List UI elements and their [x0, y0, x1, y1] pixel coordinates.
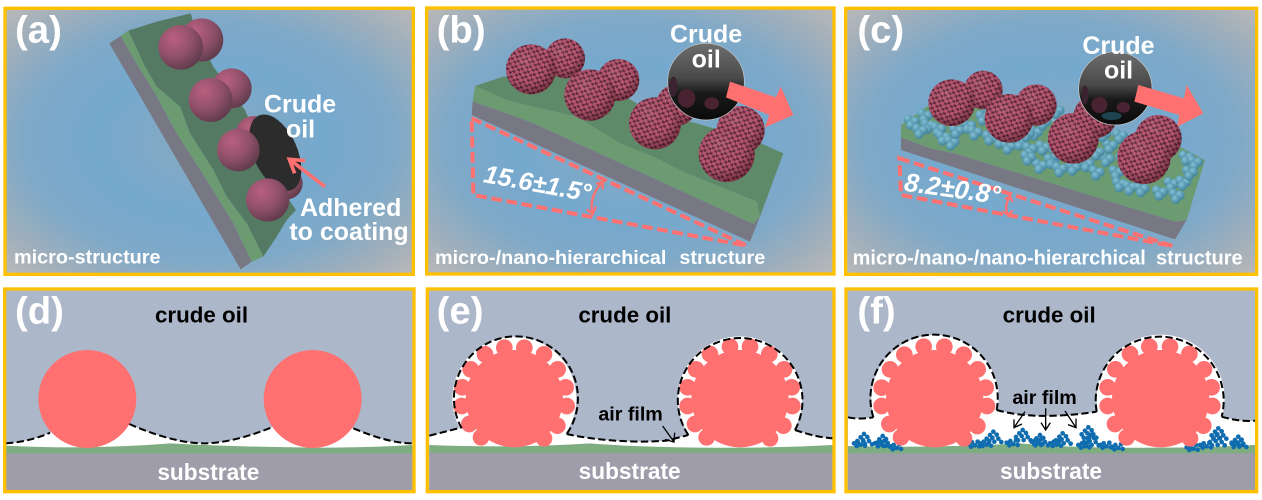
arrows: air film — [1014, 408, 1076, 430]
label: substrate: substrate — [1000, 458, 1102, 484]
label: crude oil: crude oil — [155, 303, 248, 328]
substrate side — [109, 36, 252, 269]
coating top surface — [128, 13, 296, 257]
label: crude oil: Crude — [1082, 32, 1155, 60]
coating front face — [121, 31, 263, 262]
label: crude oil: oil — [286, 115, 315, 143]
frame (a) — [5, 8, 413, 274]
nano particle clusters — [904, 99, 1203, 204]
substrate side — [472, 102, 760, 242]
label: crude oil: oil — [1104, 56, 1133, 84]
label: crude oil: Crude — [264, 91, 336, 119]
air pockets — [848, 335, 1255, 463]
label: structure name: micro-/nano-/nano-hierarchical — [853, 248, 1146, 270]
coating front face — [901, 125, 1187, 222]
panel (f): micro-/nano-/nano wetting — [846, 289, 1257, 492]
heading (f): (f) — [857, 289, 896, 332]
crude oil sphere — [668, 43, 744, 120]
dashed tilt wedge — [899, 158, 1173, 246]
label: structure name: structure — [679, 247, 765, 269]
nano-bumped sphere left — [873, 338, 995, 447]
crude oil droplet — [239, 107, 312, 199]
heading (d): (d) — [15, 289, 64, 332]
label: structure name: micro-/nano-hierarchical — [435, 247, 666, 269]
tilt angle arrow — [1003, 197, 1013, 215]
crude oil sphere — [1079, 52, 1152, 125]
nano-bumped sphere right — [1099, 338, 1221, 447]
micro spheres — [158, 18, 303, 199]
label: crude oil: crude oil — [1003, 303, 1096, 328]
label: substrate: substrate — [579, 458, 681, 484]
coating layer — [6, 443, 413, 454]
panel (d): micro-structure wetting — [5, 289, 414, 492]
front micro spheres — [217, 129, 289, 222]
substrate — [848, 453, 1255, 491]
panel (c): micro-/nano-/nano-hierarchical structure — [846, 8, 1257, 274]
nano-bumped sphere left — [453, 339, 575, 447]
panel (b): micro-/nano-hierarchical structure — [427, 8, 834, 274]
substrate — [6, 453, 413, 491]
label: crude oil: oil — [692, 45, 721, 73]
heading (a): (a) — [15, 8, 62, 51]
label: air film: air film — [598, 404, 663, 426]
substrate side — [901, 137, 1187, 239]
label: substrate: substrate — [157, 459, 259, 485]
label: air film: air film — [1012, 387, 1077, 409]
coating top surface — [475, 75, 783, 217]
tilt angle value: 8.2±0.8° — [902, 167, 1003, 210]
label: structure name: structure — [1156, 248, 1243, 270]
label: adhered to coating: to coating — [289, 218, 409, 246]
label: adhered to coating: Adhered — [300, 194, 401, 222]
tilt angle arrow — [587, 182, 603, 214]
oil interface dashed line — [6, 424, 413, 443]
frame (e) — [427, 289, 834, 492]
frame (d) — [5, 289, 414, 492]
coating top surface — [901, 100, 1205, 220]
arrow: air film — [663, 426, 675, 442]
substrate — [429, 453, 833, 491]
nano-bumped sphere right — [679, 338, 801, 447]
nano-textured spheres — [506, 38, 765, 182]
blue nano particle clusters — [852, 425, 1249, 452]
dashed tilt wedge — [472, 118, 747, 246]
micro spheres — [38, 350, 362, 448]
label: crude oil: crude oil — [578, 303, 671, 328]
nano-textured spheres — [928, 71, 1182, 184]
heading (b): (b) — [437, 8, 486, 51]
panel (a): micro-structure coating — [5, 8, 413, 274]
coating layer — [848, 443, 1255, 454]
air pockets — [6, 424, 413, 450]
arrow: roll-off direction — [726, 82, 793, 127]
coating layer — [429, 443, 833, 454]
tilt angle value: 15.6±1.5° — [482, 160, 594, 208]
oil interface dashed line — [848, 335, 1255, 421]
frame (f) — [846, 289, 1257, 492]
label: micro-structure: micro-structure — [14, 246, 161, 268]
panel (e): micro-/nano wetting — [427, 289, 834, 492]
coating front face — [473, 86, 760, 224]
frame (b) — [427, 8, 834, 274]
frame (c) — [846, 8, 1257, 274]
arrow: adhesion — [289, 159, 325, 187]
heading (c): (c) — [857, 8, 904, 51]
label: crude oil: Crude — [670, 21, 742, 49]
air pockets — [429, 336, 833, 461]
oil interface dashed line — [429, 336, 833, 442]
heading (e): (e) — [437, 289, 484, 332]
arrow: roll-off direction — [1134, 85, 1203, 127]
